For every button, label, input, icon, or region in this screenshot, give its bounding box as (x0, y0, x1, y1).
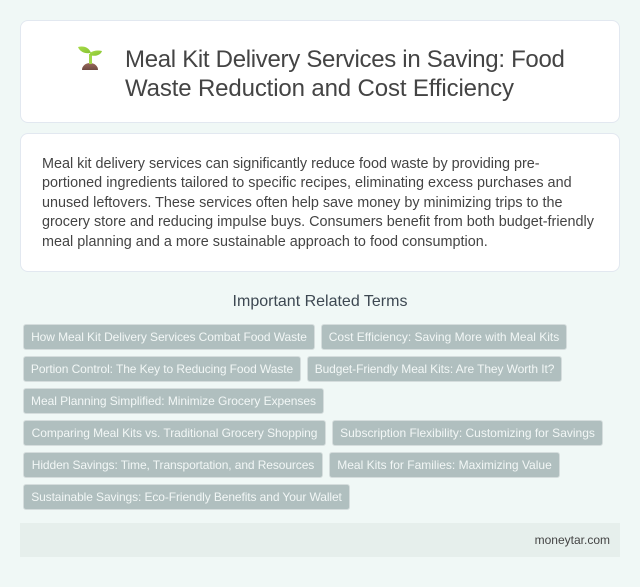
summary text: unused leftovers. These services often help save money by minimizing trips to the (42, 195, 562, 211)
tag (307, 356, 562, 382)
tag (23, 452, 323, 478)
panel: summary card (20, 133, 620, 272)
summary text: Meal kit delivery services can significantly reduce food waste by providing pre- (42, 156, 540, 172)
footer text: moneytar.com (535, 533, 610, 547)
footer bar (20, 523, 620, 557)
summary text: grocery store and reducing impulse buys. Consumers benefit from both budget-friendly (42, 214, 594, 230)
title (125, 46, 565, 102)
icon: seedling (78, 46, 102, 70)
tag: Cost Efficiency: Saving More with Meal Kits (329, 330, 559, 344)
tag: Subscription Flexibility: Customizing for Savings (340, 426, 595, 440)
summary text: portioned ingredients tailored to specific recipes, eliminating excess purchases and (42, 175, 572, 191)
title: Waste Reduction and Cost Efficiency (125, 75, 514, 102)
tag: Portion Control: The Key to Reducing Food Waste (31, 362, 293, 376)
heading: related terms: Important Related Terms (233, 293, 407, 310)
tag (23, 388, 324, 414)
tag (321, 324, 567, 350)
summary text: meal planning and a more sustainable approach to food consumption. (42, 234, 488, 250)
tag (329, 452, 560, 478)
tag: Sustainable Savings: Eco-Friendly Benefits and Your Wallet (31, 490, 342, 504)
tag: Comparing Meal Kits vs. Traditional Grocery Shopping (32, 426, 317, 440)
tag: Meal Kits for Families: Maximizing Value (337, 458, 552, 472)
tag: Budget-Friendly Meal Kits: Are They Worth It? (315, 362, 554, 376)
panel: title card (20, 20, 620, 123)
title: Meal Kit Delivery Services in Saving: Food (125, 46, 565, 73)
tag: Hidden Savings: Time, Transportation, and Resources (32, 458, 314, 472)
tag (23, 324, 315, 350)
tag (23, 420, 326, 446)
tag (23, 484, 350, 510)
summary text (42, 156, 594, 250)
tag: How Meal Kit Delivery Services Combat Food Waste (31, 330, 307, 344)
tag (23, 356, 301, 382)
tag (332, 420, 603, 446)
tag: Meal Planning Simplified: Minimize Grocery Expenses (31, 394, 316, 408)
